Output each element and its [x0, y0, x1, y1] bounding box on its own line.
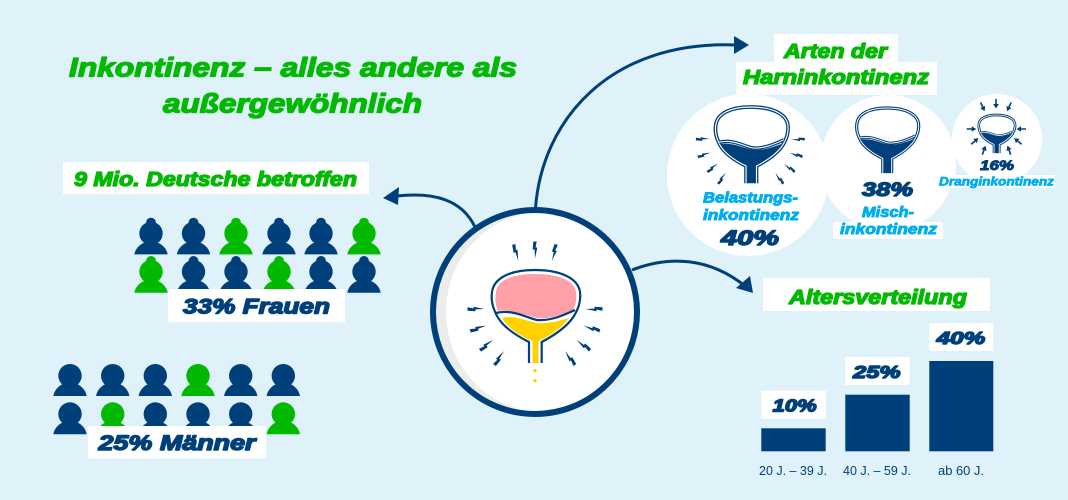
bar: ab 60 J.: ab 60 J.: [938, 463, 984, 478]
label: 33% Frauen: 33% Frauen: [183, 295, 330, 318]
pictogram: men: [53, 364, 300, 434]
icon: bladder with inward arrows: [967, 99, 1026, 156]
panel: Mischinkontinenz: [820, 95, 956, 239]
value: 38%: 38%: [862, 179, 913, 201]
panel: Belastungsinkontinenz: [667, 94, 829, 256]
title: Inkontinenz – alles andere als: [69, 52, 517, 82]
arrow: to types of incontinence: [536, 36, 749, 208]
value: 16%: 16%: [980, 157, 1015, 173]
bar: 40 J. – 59 J.: 40 J. – 59 J.: [843, 463, 911, 478]
label: 33% Frauen: [168, 289, 345, 322]
heading: Arten der Harninkontinenz: [736, 34, 937, 95]
label: Belastungsinkontinenz: inkontinenz: [703, 208, 800, 224]
central bladder circle: [433, 210, 640, 414]
icon: bladder with urine: [492, 270, 580, 382]
bar chart: age distribution: [759, 323, 993, 478]
heading: 9 Mio. Deutsche betroffen: 9 Mio. Deutsche betroffen: [74, 169, 357, 191]
label: 25% Männer: [88, 426, 266, 458]
panel: Dranginkontinenz: [938, 94, 1055, 189]
heading: 9 Mio. Deutsche betroffen: [63, 162, 369, 194]
value: 40%: 40%: [720, 227, 779, 250]
label: Belastungsinkontinenz: [703, 191, 800, 224]
pictogram: women: [134, 218, 381, 293]
label: Mischinkontinenz: Misch-: [862, 205, 914, 221]
bar: 40 J. – 59 J.: [843, 357, 911, 478]
arrow: to age distribution: [632, 261, 753, 293]
icon: bladder with stress bolts: [696, 107, 805, 185]
heading: Altersverteilung: Altersverteilung: [788, 286, 968, 309]
bar: 20 J. – 39 J.: 10%: [773, 396, 817, 416]
heading: Arten der Harninkontinenz: Arten der: [783, 40, 888, 63]
label: Mischinkontinenz: inkontinenz: [840, 222, 938, 238]
bar: ab 60 J.: [929, 323, 993, 478]
label: Dranginkontinenz: Dranginkontinenz: [939, 177, 1054, 189]
bar: 20 J. – 39 J.: [759, 391, 827, 478]
arrow: to affected people: [383, 187, 475, 227]
heading: Arten der Harninkontinenz: Harninkontinenz: [743, 66, 930, 89]
label: Mischinkontinenz: [833, 205, 943, 239]
icon: lightning bolts: [468, 242, 602, 366]
title: außergewöhnlich: [163, 88, 422, 118]
label: 25% Männer: 25% Männer: [97, 432, 258, 455]
title: [69, 52, 517, 118]
bar: 20 J. – 39 J.: 20 J. – 39 J.: [759, 463, 827, 478]
bar: 40 J. – 59 J.: 25%: [852, 362, 901, 382]
bar: ab 60 J.: 40%: [935, 328, 986, 348]
icon: bladder half full: [857, 108, 919, 173]
heading: Altersverteilung: [763, 278, 990, 311]
label: Belastungsinkontinenz: Belastungs-: [703, 191, 798, 207]
